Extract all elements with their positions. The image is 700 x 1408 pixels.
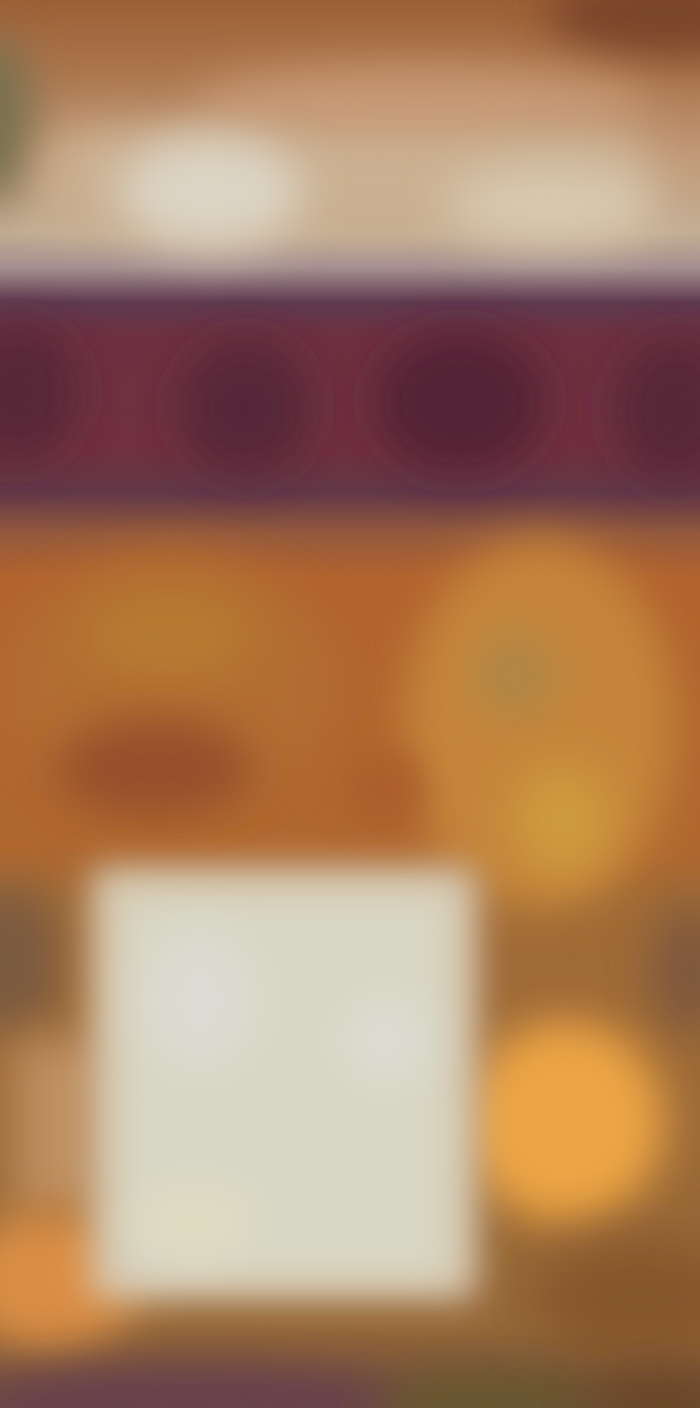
left warm strip <box>15 1040 105 1210</box>
card cool spot <box>148 936 252 1064</box>
panel: orange section <box>5 540 675 910</box>
card glow <box>90 866 478 1300</box>
orange circle <box>465 1020 665 1224</box>
header tan band <box>50 130 650 230</box>
header bright spot right <box>445 167 655 243</box>
header bright spot left <box>118 137 302 247</box>
white card <box>122 896 448 1276</box>
left oval highlight <box>85 589 255 681</box>
dark circle 1 <box>0 324 76 460</box>
left oval dark centre <box>55 718 255 818</box>
header top left corner <box>0 35 34 205</box>
right oval bright spot <box>512 764 612 876</box>
lower left orange blob <box>0 1212 140 1348</box>
header top right corner <box>545 0 700 57</box>
dark circle 4 <box>617 338 700 482</box>
right oval <box>405 540 675 910</box>
card lower spot <box>137 1186 253 1258</box>
panel: lower section <box>0 866 700 1360</box>
right edge shade <box>650 905 700 1035</box>
left edge shade <box>0 885 60 1035</box>
card right spot <box>343 998 427 1082</box>
panel: dark band <box>0 324 700 482</box>
footer olive <box>375 1372 605 1408</box>
panel: header <box>0 0 700 247</box>
footer right brown <box>585 1370 700 1408</box>
header warm centre <box>190 67 650 143</box>
footer purple <box>0 1366 410 1408</box>
dark circle 2 <box>181 342 309 474</box>
oval gap accent <box>345 748 425 832</box>
lower right brown <box>530 1240 700 1360</box>
panel: footer <box>0 1366 700 1408</box>
dark circle 3 <box>376 332 544 472</box>
left oval <box>5 555 335 805</box>
right oval dim spot <box>473 631 557 719</box>
